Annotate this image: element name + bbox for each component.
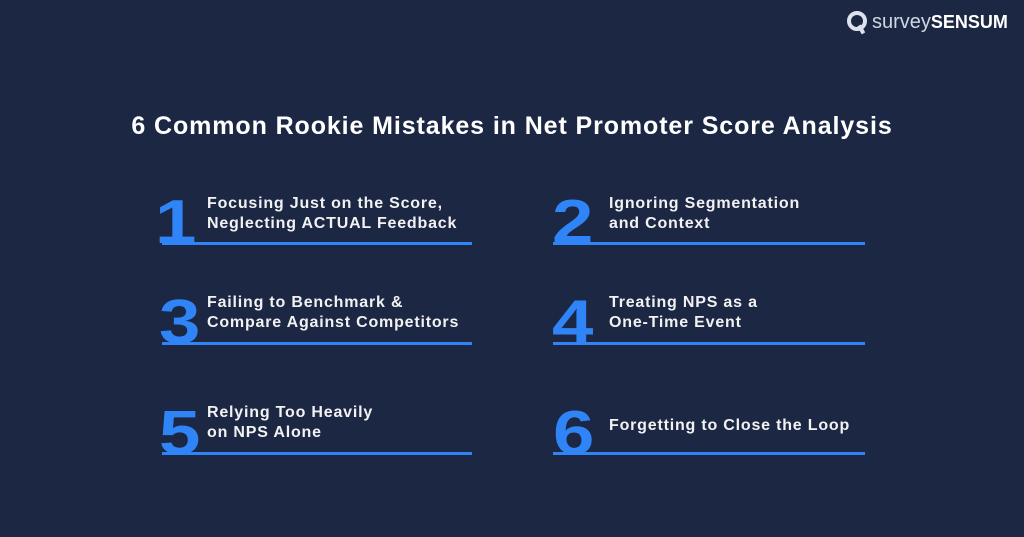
- logo text: surveySENSUM: [872, 11, 1008, 33]
- item 6: [553, 399, 865, 468]
- item 5: on NPS Alone: [207, 424, 322, 441]
- item 4: Treating NPS as a: [609, 294, 758, 311]
- item 2: and Context: [609, 215, 710, 232]
- item 4: 4: [552, 288, 593, 357]
- item 5: 5: [159, 399, 200, 468]
- item 6: Forgetting to Close the Loop: [609, 417, 850, 434]
- item 4: One-Time Event: [609, 314, 742, 331]
- item 1: Focusing Just on the Score,: [207, 195, 443, 212]
- item 1: Neglecting ACTUAL Feedback: [207, 215, 457, 232]
- title: 6 Common Rookie Mistakes in Net Promoter Score Analysis: [131, 112, 893, 140]
- item 3: 3: [159, 288, 200, 357]
- item 6: 6: [553, 399, 594, 468]
- icon: logo mark: [847, 11, 867, 34]
- item 3: Compare Against Competitors: [207, 314, 459, 331]
- item 5: Relying Too Heavily: [207, 404, 373, 421]
- logo: [847, 11, 1008, 34]
- item 3: [159, 288, 472, 357]
- item 3: Failing to Benchmark &: [207, 294, 403, 311]
- item 4: [552, 288, 865, 357]
- item 2: [552, 188, 865, 257]
- item 1: [155, 188, 472, 257]
- item 2: Ignoring Segmentation: [609, 195, 800, 212]
- item 5: [159, 399, 472, 468]
- item 1: 1: [155, 188, 196, 257]
- item 2: 2: [552, 188, 593, 257]
